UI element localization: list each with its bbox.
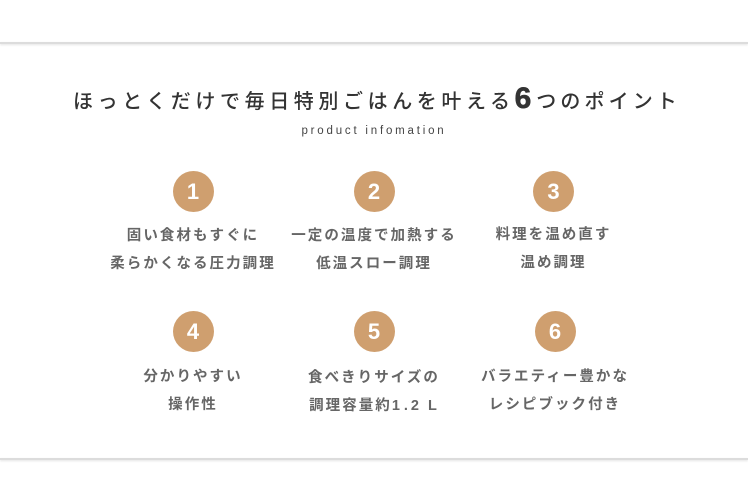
subtitle: product infomation	[301, 125, 446, 137]
point 2 text line 2: 低温スロー調理	[316, 256, 432, 272]
number badge 2	[354, 171, 394, 212]
number badge 4: 4	[187, 319, 199, 344]
number badge 2: 2	[368, 179, 380, 204]
point 1	[110, 171, 276, 272]
number badge 5: 5	[368, 319, 380, 344]
number badge 1: 1	[187, 179, 199, 204]
point 4	[143, 311, 243, 413]
point 2 text: 一定の温度で加熱する	[291, 228, 457, 244]
number badge 5	[354, 311, 394, 352]
point 1 text line 2: 柔らかくなる圧力調理	[110, 256, 276, 272]
point 2	[291, 171, 457, 272]
point 5 text: 食べきりサイズの	[308, 370, 440, 386]
point 4 text: 分かりやすい	[143, 369, 243, 385]
point 6	[481, 311, 629, 413]
point 5 text line 2: 調理容量約1.2L	[309, 398, 439, 414]
top divider	[0, 42, 748, 44]
number badge 3	[533, 171, 574, 212]
point 6 text: バラエティー豊かな	[481, 369, 629, 385]
point 3	[496, 171, 611, 271]
number badge 4	[172, 311, 214, 352]
number badge 6	[534, 311, 576, 352]
point 3 text: 料理を温め直す	[496, 227, 611, 243]
point 3 text line 2: 温め調理	[520, 255, 587, 271]
number badge 6: 6	[549, 319, 561, 344]
point 4 text line 2: 操作性	[168, 397, 218, 413]
point 1 text: 固い食材もすぐに	[127, 228, 259, 244]
point 5	[308, 311, 440, 414]
number badge 3: 3	[547, 179, 560, 204]
number badge 1	[172, 171, 214, 212]
title: ほっとくだけで毎日特別ごはんを叶える6つのポイント	[73, 82, 681, 115]
point 6 text line 2: レシピブック付き	[489, 397, 621, 413]
bottom divider	[0, 458, 748, 460]
